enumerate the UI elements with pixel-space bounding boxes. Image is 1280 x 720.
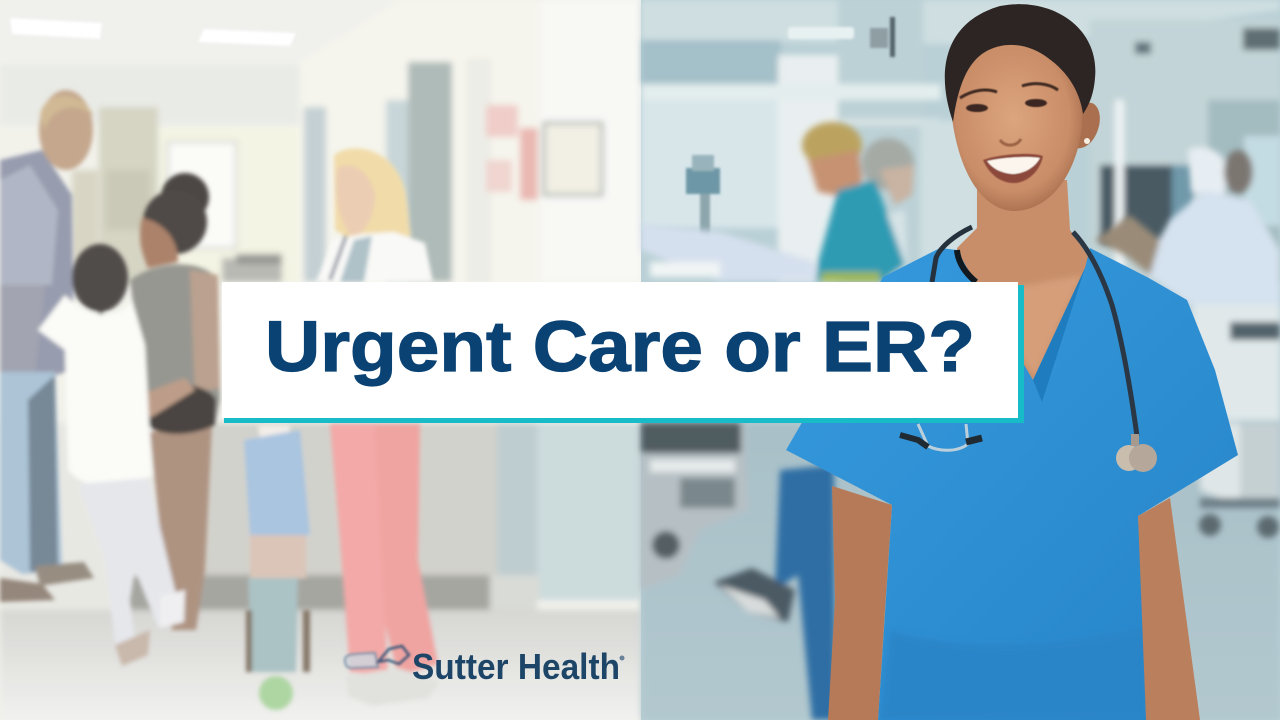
white wash over left photo	[0, 0, 641, 720]
banner teal edge	[224, 285, 1024, 423]
logo: Sutter Health	[345, 646, 624, 687]
nurse in blue scrubs	[786, 4, 1238, 720]
nurse head	[952, 42, 1082, 211]
banner white box	[222, 282, 1018, 418]
small child in blue	[244, 425, 310, 710]
nurse eyebrows, eyes, nose, smile	[960, 84, 1058, 183]
nurse hair	[945, 4, 1095, 122]
nurse scrub top	[786, 248, 1238, 720]
ceiling lights	[10, 18, 296, 46]
title: Urgent Care or ER?	[265, 308, 975, 387]
blurred staff and patient	[641, 122, 1280, 720]
floor and lower walls	[0, 423, 641, 720]
stethoscope tubing	[932, 227, 972, 282]
doctor in white coat and pink scrubs	[316, 148, 440, 706]
logo wordmark: Sutter Health	[412, 646, 620, 687]
nurse ear	[1075, 103, 1100, 148]
child in white	[38, 244, 185, 666]
logo icon	[345, 646, 409, 668]
man in grey shirt	[0, 90, 94, 602]
ceiling fixtures	[686, 17, 895, 239]
title banner	[222, 282, 1024, 423]
stethoscope ear tips	[900, 424, 982, 450]
nurse arms	[828, 486, 892, 720]
woman with hair bun	[130, 173, 220, 630]
stethoscope chest piece	[1116, 434, 1157, 472]
nurse neck and chest	[955, 180, 1092, 382]
panel: left hallway photo	[0, 0, 641, 720]
panel: right emergency room photo	[641, 0, 1280, 720]
people: family and doctor in hallway	[0, 90, 440, 710]
